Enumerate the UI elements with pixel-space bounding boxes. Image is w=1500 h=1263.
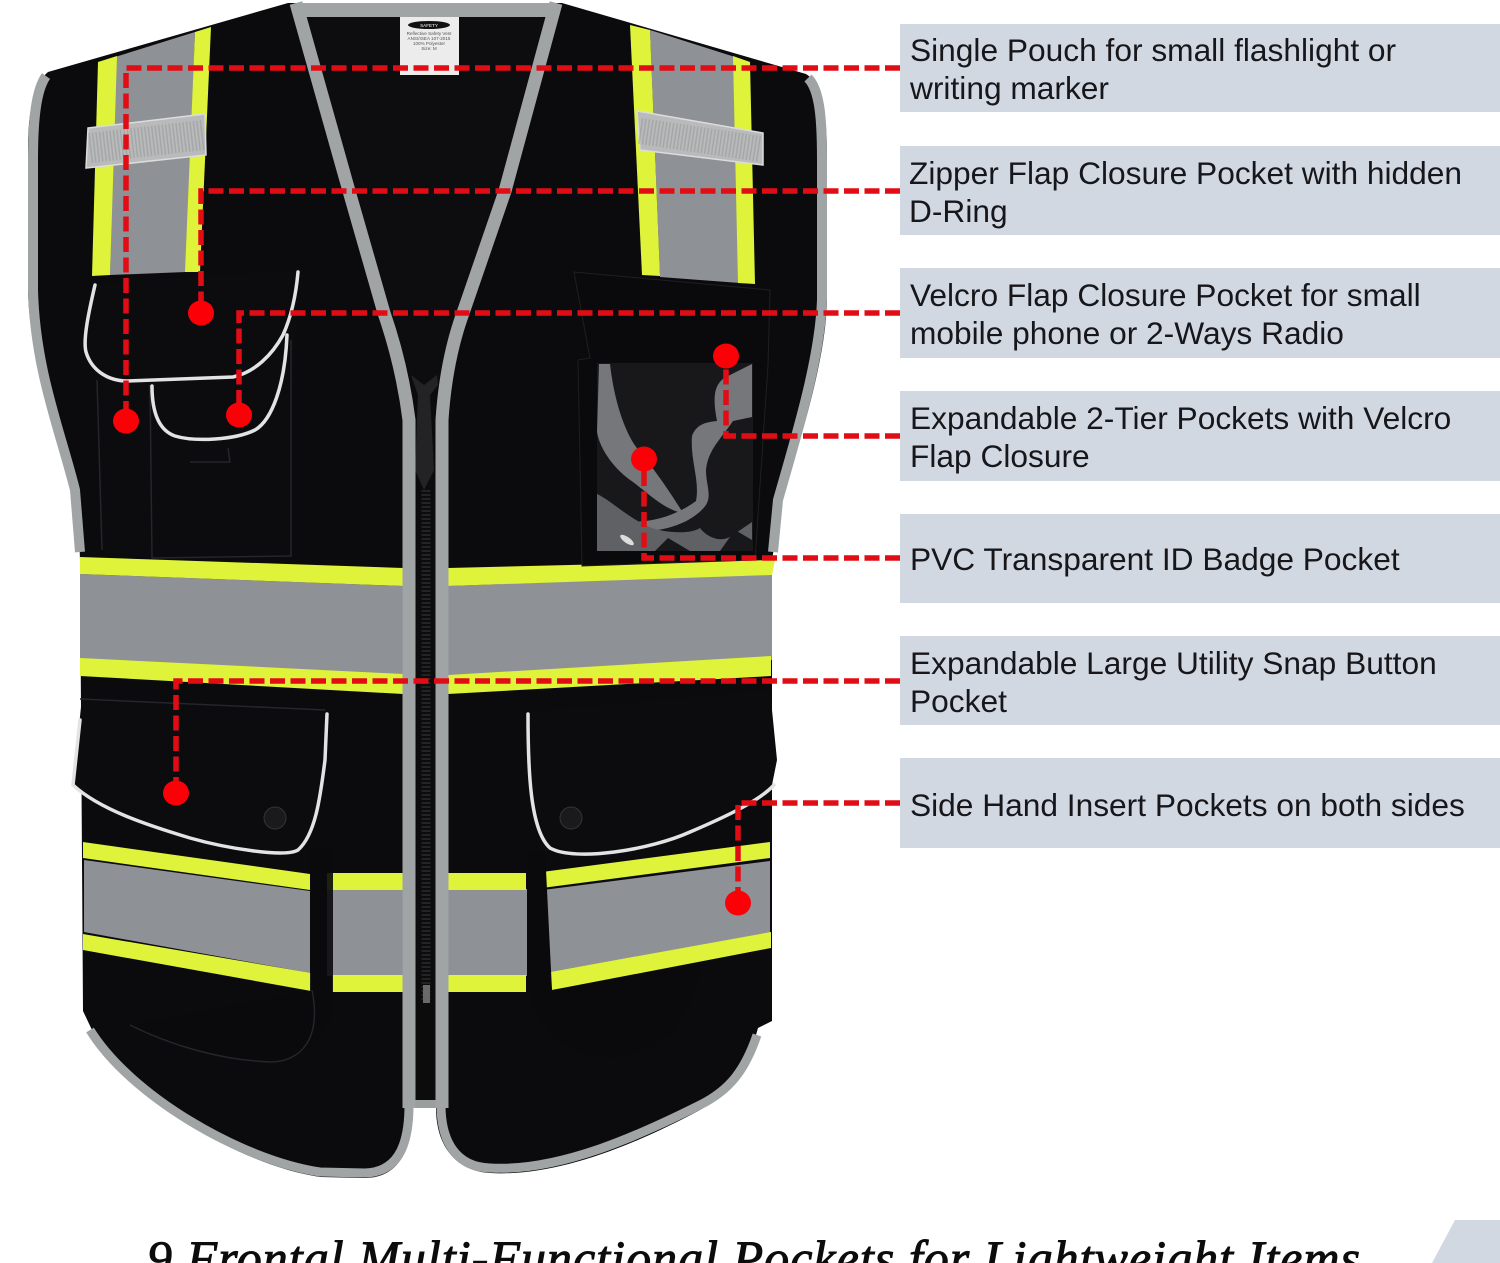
label: velcro flap pocket: mobile phone or 2-Ways Radio: [910, 315, 1344, 351]
label: utility snap pocket: Pocket: [910, 683, 1007, 719]
label: zipper flap pocket: [900, 146, 1500, 235]
label: 2-tier pockets: [900, 391, 1500, 481]
left webbing loop: [86, 114, 206, 168]
callout leader: 2-tier pockets: [713, 344, 900, 436]
neck size label: ANSI/ISEA 107-2015: [408, 36, 451, 41]
corner shape: [1432, 1220, 1500, 1263]
neck size label: [400, 17, 459, 75]
callout leader: utility snap pocket: [163, 681, 900, 806]
safety vest illustration: [28, 3, 900, 1178]
grey edge binding: [33, 3, 822, 1173]
callout leader: ID badge pocket: [631, 446, 900, 558]
lower left utility pocket: [73, 697, 333, 1062]
callout leader: single pouch: [113, 68, 900, 434]
chest reflective band: [80, 557, 775, 694]
label: velcro flap pocket: Velcro Flap Closure Pocket for small: [910, 277, 1421, 313]
neck size label: 100% Polyester: [413, 41, 446, 46]
upper left pockets: [85, 270, 298, 558]
label: utility snap pocket: [900, 636, 1500, 725]
left shoulder reflective strap: [92, 27, 211, 276]
label: single pouch: [900, 24, 1500, 112]
label: ID badge pocket: [900, 514, 1500, 603]
label: single pouch: writing marker: [909, 70, 1109, 106]
label: utility snap pocket: Expandable Large Utility Snap Button: [910, 645, 1437, 681]
callout leader: zipper flap pocket: [188, 191, 900, 326]
neck size label: Reflective Safety Vest: [407, 31, 452, 36]
label: zipper flap pocket: D-Ring: [909, 193, 1008, 229]
right shoulder reflective strap: [630, 25, 755, 284]
neck size label: SAFETY: [420, 23, 438, 28]
label: single pouch: Single Pouch for small flashlight or: [910, 32, 1397, 68]
callout leader: side hand pockets: [725, 803, 900, 916]
label: ID badge pocket: PVC Transparent ID Badge Pocket: [910, 541, 1400, 577]
label: 2-tier pockets: Expandable 2-Tier Pockets with Velcro: [910, 400, 1451, 436]
waist reflective band: [83, 842, 771, 992]
label: side hand pockets: Side Hand Insert Pockets on both sides: [910, 787, 1465, 823]
label: side hand pockets: [900, 758, 1500, 848]
label: velcro flap pocket: [900, 268, 1500, 358]
label: zipper flap pocket: Zipper Flap Closure Pocket with hidden: [909, 155, 1462, 191]
neck opening lining: [305, 17, 553, 380]
lower right utility pocket: [527, 690, 777, 1058]
vest body: [28, 3, 827, 1178]
ID badge pocket: [574, 272, 770, 566]
right webbing loop: [637, 111, 763, 165]
callout leader: velcro flap pocket: [226, 313, 900, 428]
zipper: [411, 375, 438, 1108]
label: 2-tier pockets: Flap Closure: [910, 438, 1090, 474]
neck size label: Size: M: [421, 46, 437, 51]
